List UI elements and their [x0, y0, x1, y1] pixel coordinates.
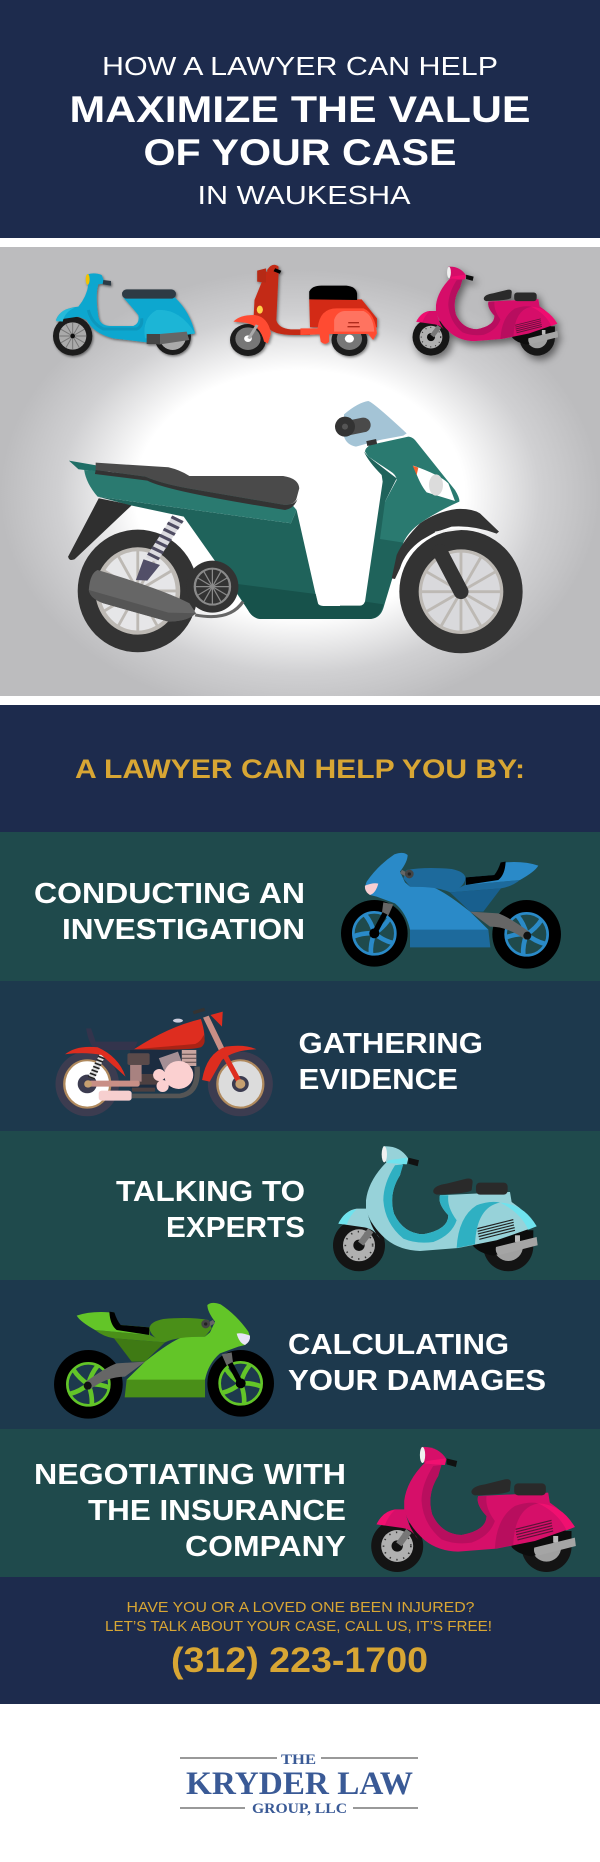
header banner: [0, 0, 600, 238]
text: negotiating with the insurance company: THE INSURANCE: [88, 1495, 346, 1527]
title: IN WAUKESHA: [198, 182, 410, 210]
logo: the kryder law group: [0, 1704, 600, 1862]
text: calculating your damages: YOUR DAMAGES: [288, 1365, 546, 1397]
icon: red cruiser motorcycle: [55, 1009, 273, 1116]
text: conducting an investigation: [34, 878, 305, 946]
text: talking to experts: TALKING TO: [116, 1176, 305, 1208]
panel: negotiating with the insurance company: [0, 1429, 600, 1577]
text: calculating your damages: [288, 1329, 546, 1397]
panel: conducting an investigation: [0, 832, 600, 981]
text: negotiating with the insurance company: NEGOTIATING WITH: [34, 1459, 346, 1491]
text: talking to experts: EXPERTS: [166, 1212, 305, 1244]
text: calculating your damages: CALCULATING: [288, 1329, 509, 1361]
title: [70, 53, 530, 210]
panel: call to action: [0, 1577, 600, 1704]
text: call to action: [105, 1599, 492, 1635]
icon: blue scooter: [53, 273, 195, 356]
text: conducting an investigation: CONDUCTING AN: [34, 878, 305, 910]
icon: blue sport motorcycle: [341, 853, 561, 969]
panel: lawyer can help heading: [0, 705, 600, 832]
title: MAXIMIZE THE VALUE: [70, 89, 530, 130]
text: negotiating with the insurance company: [34, 1459, 346, 1563]
panel: calculating your damages: [0, 1280, 600, 1429]
title: OF YOUR CASE: [144, 132, 456, 173]
text: negotiating with the insurance company: COMPANY: [185, 1531, 346, 1563]
heading: A LAWYER CAN HELP YOU BY:: [75, 754, 525, 784]
logo: the kryder law group: GROUP, LLC: [252, 1801, 347, 1817]
text: gathering evidence: EVIDENCE: [298, 1064, 458, 1096]
text: gathering evidence: [298, 1028, 483, 1096]
text: gathering evidence: GATHERING: [298, 1028, 483, 1060]
icon: green scooter large: [68, 401, 523, 653]
icon: red scooter: [230, 265, 377, 356]
icon: light blue scooter: [333, 1146, 538, 1271]
text: call to action: LET’S TALK ABOUT YOUR CASE, CALL US, IT’S FREE!: [105, 1618, 492, 1635]
icon: green sport motorcycle: [54, 1303, 274, 1419]
icon: pink scooter small: [412, 267, 558, 356]
logo: the kryder law group: KRYDER LAW: [186, 1766, 413, 1802]
phone number: (312) 223-1700: [171, 1641, 428, 1680]
icon: pink scooter: [371, 1447, 576, 1572]
text: talking to experts: [116, 1176, 305, 1244]
panel: talking to experts: [0, 1131, 600, 1280]
title: HOW A LAWYER CAN HELP: [102, 53, 498, 81]
text: call to action: HAVE YOU OR A LOVED ONE BEEN INJURED?: [126, 1599, 474, 1616]
panel: gathering evidence: [0, 981, 600, 1131]
text: conducting an investigation: INVESTIGATION: [62, 914, 305, 946]
logo: the kryder law group: THE: [281, 1752, 316, 1768]
panel: scooter showcase: [0, 247, 600, 696]
